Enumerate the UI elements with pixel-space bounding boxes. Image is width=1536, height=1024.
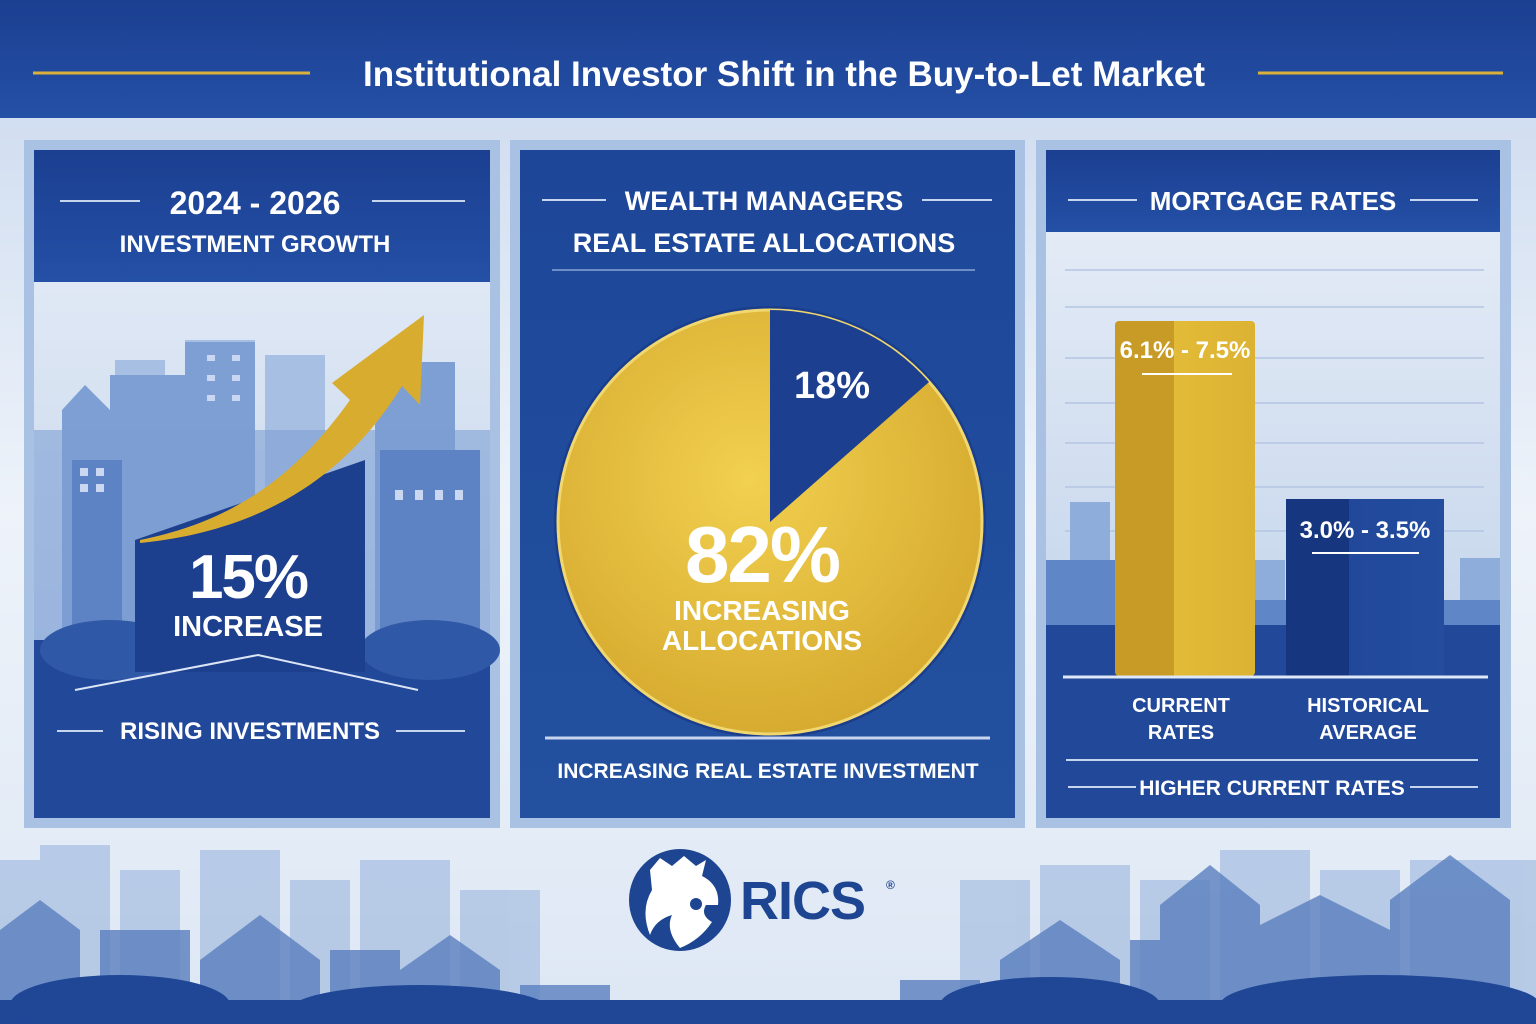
- footer label: INCREASING REAL ESTATE INVESTMENT: [557, 760, 979, 783]
- header band: [0, 0, 1536, 118]
- pie chart: INCREASING: [674, 595, 850, 626]
- panel header: [1046, 150, 1500, 232]
- axis labels: RATES: [1148, 722, 1214, 744]
- pie chart: 18%: [794, 365, 870, 407]
- pie chart: ALLOCATIONS: [662, 625, 862, 656]
- panel header: 2024 - 2026: [170, 185, 340, 221]
- axis labels: AVERAGE: [1319, 722, 1417, 744]
- panel header: INVESTMENT GROWTH: [120, 231, 390, 258]
- panel heading: WEALTH MANAGERS: [625, 186, 903, 216]
- panel heading: [542, 186, 992, 270]
- panel: mortgage rates: [1036, 140, 1511, 828]
- bottom skyline: [0, 845, 1536, 1024]
- panel: investment growth: [24, 140, 500, 828]
- bar chart: [1063, 321, 1488, 677]
- bar chart: 3.0% - 3.5%: [1300, 517, 1430, 544]
- panel header: [34, 150, 490, 282]
- footer label: HIGHER CURRENT RATES: [1139, 777, 1405, 800]
- panel heading: REAL ESTATE ALLOCATIONS: [573, 228, 955, 258]
- footer label: RISING INVESTMENTS: [120, 718, 380, 745]
- big value: [173, 543, 323, 643]
- big value: 15%: [189, 543, 308, 612]
- panel: wealth managers: [510, 140, 1025, 828]
- bar chart: 6.1% - 7.5%: [1120, 337, 1250, 364]
- dark block with value: [135, 460, 365, 672]
- icon: gold growth arrow: [140, 315, 424, 543]
- axis labels: HISTORICAL: [1307, 695, 1429, 717]
- logo: RICS: ®: [886, 878, 895, 892]
- axis labels: CURRENT: [1132, 695, 1230, 717]
- title: Institutional Investor Shift in the Buy-to-Let Market: [363, 55, 1205, 94]
- panel header: MORTGAGE RATES: [1150, 186, 1396, 216]
- axis labels: [1132, 695, 1429, 744]
- logo: RICS: [629, 849, 895, 951]
- pie chart: 82%: [685, 510, 840, 599]
- pie chart: [554, 306, 986, 738]
- big value: INCREASE: [173, 611, 323, 643]
- city illustration: [34, 340, 500, 818]
- logo: RICS: RICS: [740, 871, 865, 931]
